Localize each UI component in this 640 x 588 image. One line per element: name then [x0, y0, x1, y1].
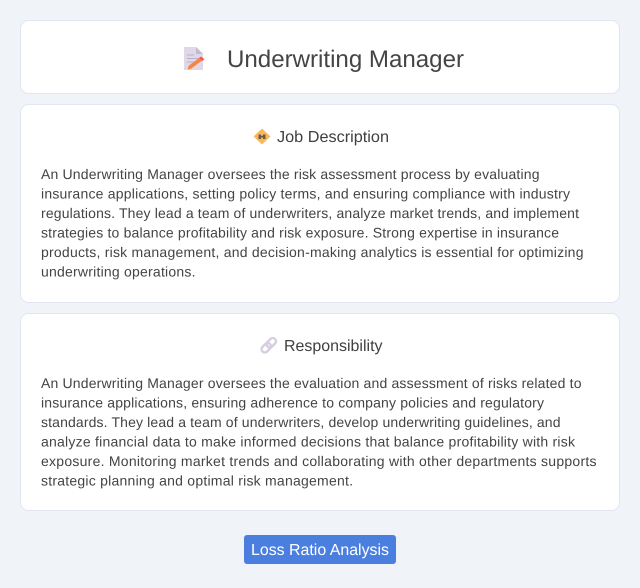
text block: job description: An Underwriting Manager oversees the risk assessment process by evaluating [41, 166, 540, 182]
text block: responsibility: strategic planning and optimal risk management. [41, 472, 353, 488]
text block: job description: strategies to balance profitability and risk exposure. Strong expertise in insurance [41, 224, 559, 240]
heading: job description: Job Description [277, 129, 389, 146]
icon: diamond sign [254, 130, 270, 144]
text block: responsibility: An Underwriting Manager oversees the evaluation and assessment of risks related to [41, 375, 582, 391]
icon: chain link [260, 337, 277, 354]
heading: responsibility: Responsibility [284, 338, 382, 355]
panel: responsibility [20, 314, 620, 510]
text block: responsibility [41, 375, 596, 488]
text block: responsibility: exposure. Monitoring market trends and collaborating with other departments supports [41, 453, 596, 469]
button: loss ratio analysis [244, 535, 396, 564]
text block: responsibility: analyze financial data to make informed decisions that balance profitability with risk [41, 434, 576, 450]
text block: job description: regulations. They lead a team of underwriters, analyze market trends, and implement [41, 205, 579, 221]
button: loss ratio analysis: Loss Ratio Analysis [251, 542, 389, 559]
text block: responsibility: standards. They lead a team of underwriters, develop underwriting guidelines, and [41, 414, 560, 430]
panel: job description [20, 104, 620, 302]
text block: responsibility: insurance applications, ensuring adherence to company policies and regulatory [41, 394, 544, 410]
icon: document with pencil [184, 47, 204, 70]
text block: job description: insurance applications, setting policy terms, and ensuring compliance with industry [41, 186, 570, 202]
panel: title header [20, 20, 620, 94]
text block: job description: underwriting operations. [41, 264, 196, 280]
title: Underwriting Manager [227, 46, 464, 73]
text block: job description: products, risk management, and decision-making analytics is essential for optimizing [41, 244, 584, 260]
text block: job description [41, 166, 584, 280]
